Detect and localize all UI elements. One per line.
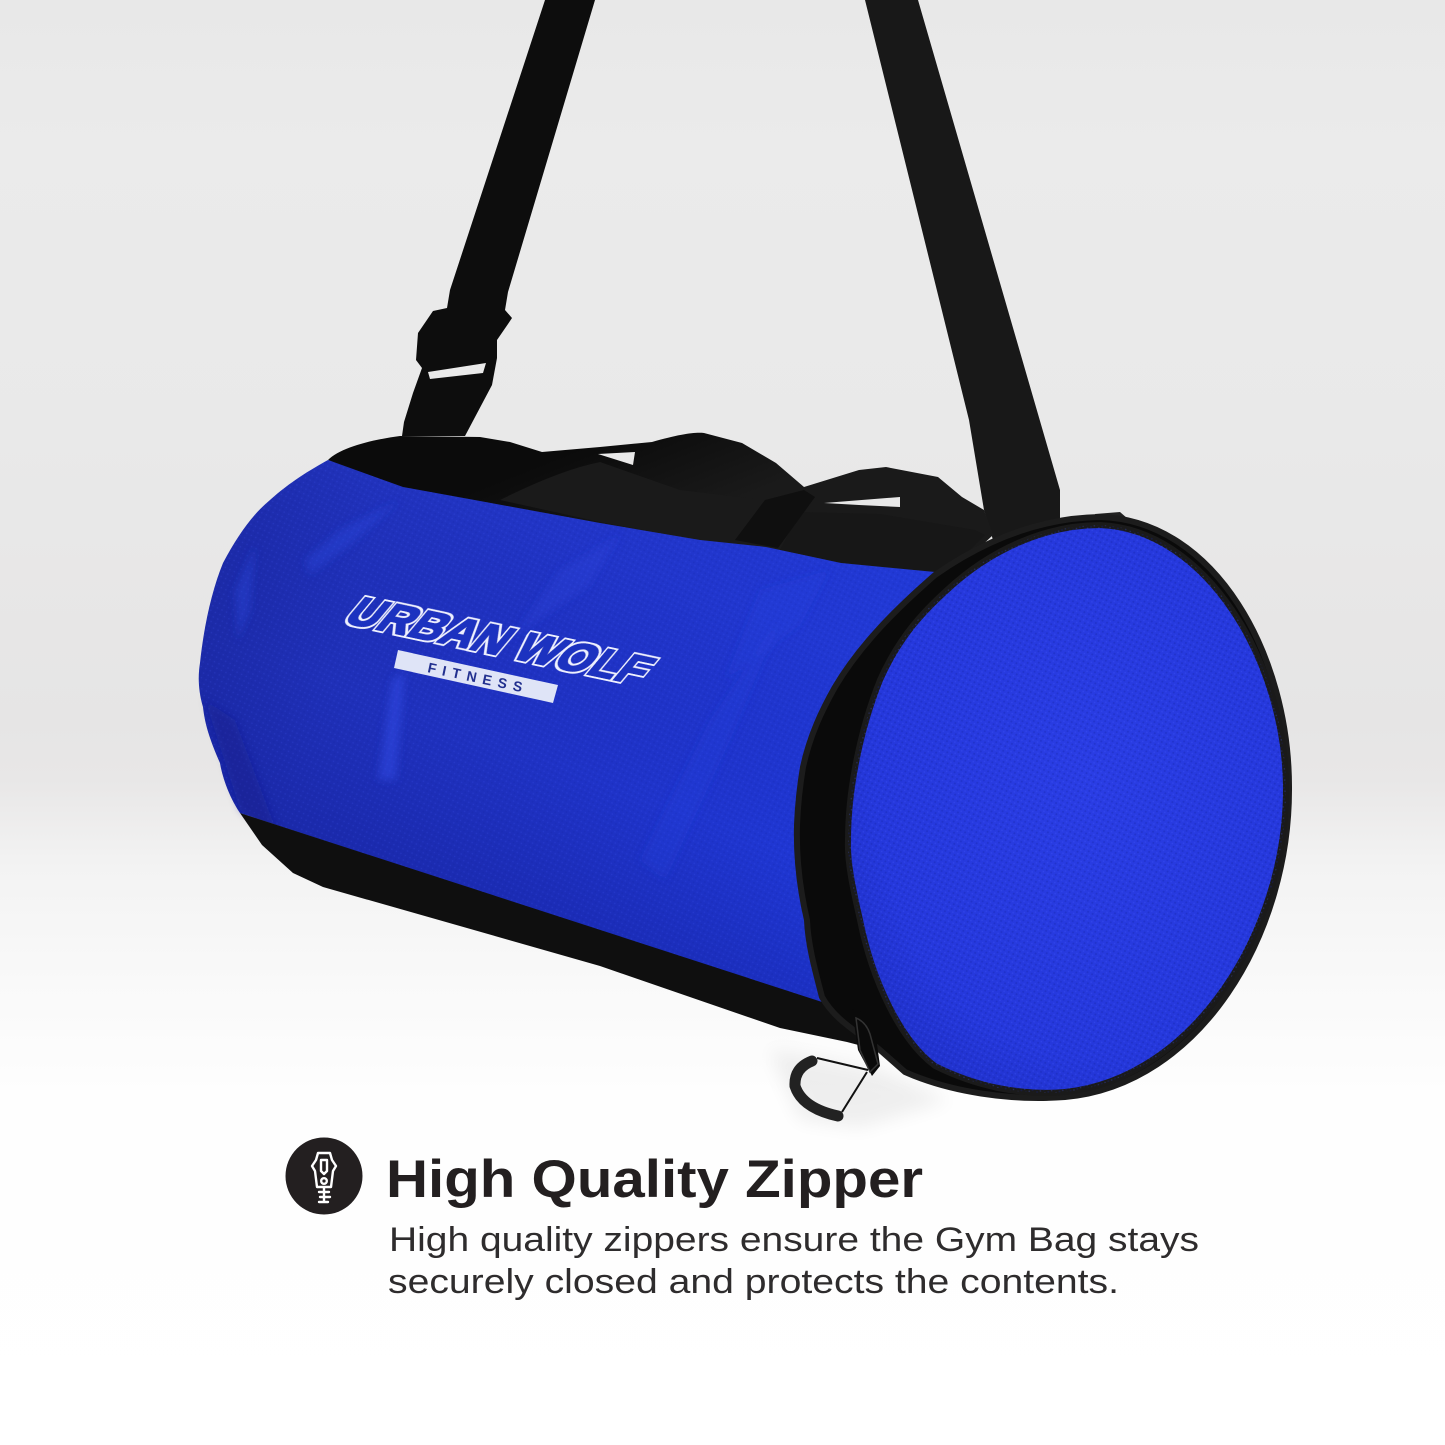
round blue end panel [848, 525, 1286, 1093]
icon: zipper badge [286, 1138, 362, 1214]
brand logo: Urban Wolf Fitness: FITNESS [426, 659, 530, 696]
description text: securely closed and protects the contents. [388, 1263, 1119, 1301]
heading: High Quality Zipper [386, 1150, 923, 1209]
description text: High quality zippers ensure the Gym Bag stays [389, 1221, 1199, 1259]
blue bag body [199, 460, 960, 1010]
brand logo: Urban Wolf Fitness: URBAN WOLF [335, 589, 665, 693]
black bottom panel [240, 813, 885, 1052]
top black panel and carry handles [328, 433, 993, 580]
description text [388, 1221, 1199, 1301]
black zipper band around the end panel [797, 512, 1289, 1098]
right shoulder strap [865, 0, 1060, 540]
left shoulder strap with buckle [402, 0, 595, 436]
ground shadow [770, 1050, 950, 1128]
zipper pull [795, 1009, 880, 1116]
fabric folds [205, 500, 830, 880]
gym bag product illustration [199, 0, 1289, 1128]
